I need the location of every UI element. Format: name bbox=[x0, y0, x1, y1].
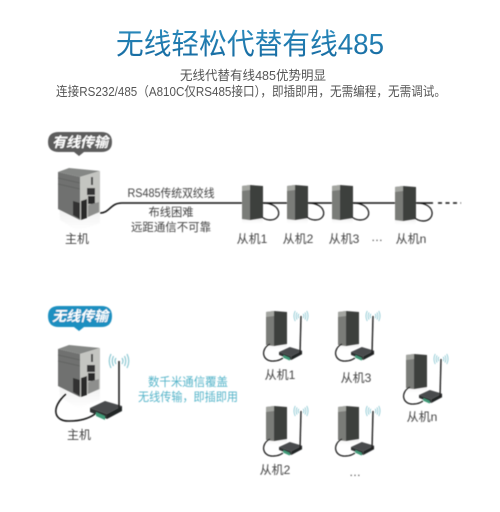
wireless slave labels: 从机2 bbox=[260, 463, 291, 477]
badge: wired bbox=[48, 132, 112, 156]
callout: wireless benefits: 无线传输，即插即用 bbox=[138, 389, 238, 404]
wireless slave labels: 从机1 bbox=[265, 368, 296, 382]
icon: router bbox=[90, 401, 122, 420]
RS485 bus cable bbox=[100, 203, 433, 213]
wireless slave 1 bbox=[264, 311, 308, 361]
badge: wired: 有线传输 bbox=[52, 134, 111, 150]
wireless slave ... bbox=[336, 406, 380, 456]
label: host: 主机 bbox=[65, 232, 89, 246]
badge: wireless bbox=[48, 306, 112, 331]
wireless slave labels bbox=[260, 368, 437, 479]
label: wiring drawbacks: 布线困难 bbox=[148, 205, 194, 219]
wireless slave labels: 从机3 bbox=[341, 371, 372, 385]
slave labels bbox=[237, 230, 426, 246]
slave 2 on bus bbox=[287, 185, 324, 223]
slave labels: … bbox=[371, 230, 383, 244]
badge: wireless: 无线传输 bbox=[52, 308, 111, 324]
slave 3 on bus bbox=[332, 185, 369, 223]
label: host: 主机 bbox=[67, 428, 91, 442]
wireless slave 3 bbox=[336, 311, 380, 361]
slave labels: 从机3 bbox=[329, 232, 360, 246]
wireless slave n bbox=[404, 354, 448, 404]
icon: host device bbox=[58, 345, 100, 408]
label: wiring drawbacks bbox=[131, 205, 211, 234]
icon: signal waves bbox=[109, 354, 129, 368]
slave n on bus bbox=[395, 186, 432, 224]
icon: antenna bbox=[118, 361, 120, 408]
title: 无线轻松代替有线485 bbox=[116, 28, 384, 61]
subtitle text: 无线代替有线485优势明显 bbox=[180, 68, 326, 83]
wireless slave 2 bbox=[264, 406, 308, 456]
icon: host device bbox=[58, 168, 100, 231]
slave labels: 从机1 bbox=[237, 232, 268, 246]
panel: wireless transmission bbox=[48, 306, 448, 479]
slave 1 on bus bbox=[242, 185, 279, 223]
label: RS485 cable: RS485传统双绞线 bbox=[128, 186, 215, 200]
slave labels: 从机2 bbox=[283, 232, 314, 246]
callout: wireless benefits: 数千米通信覆盖 bbox=[148, 374, 228, 389]
slave labels: 从机n bbox=[396, 232, 426, 246]
panel: wired transmission bbox=[48, 132, 461, 246]
label: wiring drawbacks: 远距通信不可靠 bbox=[131, 220, 211, 234]
cable: host to router bbox=[56, 394, 95, 421]
wireless slave labels: 从机n bbox=[407, 410, 437, 424]
subtitle text: 连接RS232/485（A810C仅RS485接口），即插即用，无需编程，无需调试。 bbox=[56, 84, 446, 99]
subtitle text bbox=[56, 68, 446, 99]
dashed bus continuation bbox=[438, 202, 461, 204]
callout: wireless benefits bbox=[138, 374, 238, 404]
wireless slave labels: … bbox=[349, 465, 361, 479]
